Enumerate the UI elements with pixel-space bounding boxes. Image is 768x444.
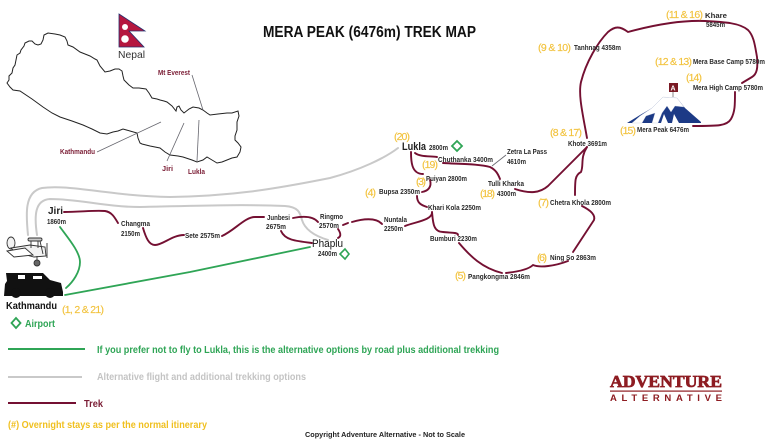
legend: trek: Trek bbox=[84, 399, 103, 410]
copyright: Copyright Adventure Alternative - Not to Scale bbox=[305, 432, 465, 439]
Chetra Khola: Chetra Khola 2800m bbox=[550, 198, 611, 207]
Jiri label bbox=[162, 123, 184, 173]
Lukla: 2800m bbox=[429, 143, 448, 152]
Jiri label: Jiri bbox=[162, 164, 173, 173]
icon: jeep bbox=[4, 273, 63, 298]
Ringmo: Ringmo bbox=[320, 212, 343, 221]
Zetra La Pass bbox=[507, 147, 547, 166]
Lukla bbox=[402, 141, 448, 153]
road route: Kathmandu to Jiri bbox=[60, 227, 80, 288]
Mt Everest label bbox=[158, 68, 203, 110]
Ringmo bbox=[319, 212, 343, 230]
Kathmandu: Kathmandu bbox=[6, 301, 57, 312]
Kathmandu label: Kathmandu bbox=[60, 147, 95, 156]
Ning So: Ning So 2863m bbox=[550, 253, 596, 262]
icon: plane bbox=[7, 237, 47, 266]
Bumburi: Bumburi 2230m bbox=[430, 234, 477, 243]
Nuntala: Nuntala bbox=[384, 215, 408, 224]
day 3: (3) bbox=[416, 176, 426, 188]
Zetra La Pass: Zetra La Pass bbox=[507, 147, 547, 156]
Lukla label: Lukla bbox=[188, 167, 206, 176]
mountain: Mera Peak bbox=[627, 83, 701, 123]
Jiri: 1860m bbox=[47, 217, 66, 226]
Kathmandu label bbox=[60, 122, 161, 156]
Changma bbox=[121, 219, 151, 238]
icon: Phaplu airport bbox=[340, 249, 349, 259]
Khare: 5845m bbox=[706, 20, 725, 29]
Tulli Kharka: Tulli Kharka bbox=[488, 179, 525, 188]
day 9 and 10: (9 & 10) bbox=[538, 42, 571, 54]
day 12 and 13: (12 & 13) bbox=[655, 56, 692, 68]
legend: overnight stays: (#) Overnight stays as per the normal itinerary bbox=[8, 420, 207, 431]
Jiri bbox=[47, 205, 66, 226]
Chuthanka: Chuthanka 3400m bbox=[438, 155, 493, 164]
trek route bbox=[64, 21, 757, 273]
Mt Everest label: Mt Everest bbox=[158, 68, 190, 77]
legend: airport bbox=[12, 318, 56, 330]
flag caption: Nepal bbox=[118, 49, 145, 61]
legend: trek bbox=[8, 399, 103, 410]
Zetra La Pass: 4610m bbox=[507, 157, 526, 166]
day 1, 2 and 21: (1, 2 & 21) bbox=[62, 304, 104, 316]
icon: Lukla airport bbox=[452, 141, 462, 151]
Jiri: Jiri bbox=[48, 205, 63, 217]
Lukla label bbox=[188, 120, 206, 176]
Khote: Khote 3691m bbox=[568, 139, 607, 148]
icon: Nepal flag bbox=[119, 14, 145, 47]
Tulli Kharka: 4300m bbox=[497, 189, 516, 198]
road route: Kathmandu to Phaplu bbox=[65, 247, 310, 295]
day 11 and 16: (11 & 16) bbox=[666, 9, 703, 21]
day 4: (4) bbox=[365, 187, 376, 199]
icon: summit flag: A bbox=[670, 86, 676, 92]
day 18: (18) bbox=[480, 188, 495, 200]
Phaplu: Phaplu bbox=[312, 238, 343, 250]
Puiyan: Puiyan 2800m bbox=[426, 174, 467, 183]
Ringmo: 2570m bbox=[319, 221, 339, 230]
Nuntala: 2250m bbox=[384, 224, 403, 233]
legend: road option: If you prefer not to fly to Lukla, this is the alternative options by road plus additional trekking bbox=[97, 345, 499, 356]
Phaplu: 2400m bbox=[318, 249, 337, 258]
flight route: Kathmandu to Lukla bbox=[27, 148, 398, 235]
Khari Kola: Khari Kola 2250m bbox=[428, 203, 481, 212]
inset map: Nepal bbox=[7, 14, 241, 176]
Tanhnag: Tanhnag 4358m bbox=[574, 43, 621, 52]
Junbesi: 2675m bbox=[266, 222, 286, 231]
day 5: (5) bbox=[455, 270, 466, 282]
Phaplu bbox=[312, 238, 343, 258]
Zetra La Pass connector bbox=[492, 155, 506, 166]
Nepal outline bbox=[7, 33, 241, 163]
legend: airport: Airport bbox=[25, 319, 56, 330]
Lukla: Lukla bbox=[402, 141, 427, 153]
logo: Adventure Alternative bbox=[610, 372, 722, 404]
day 14: (14) bbox=[686, 72, 702, 84]
Changma: Changma bbox=[121, 219, 151, 228]
day 6: (6) bbox=[537, 252, 547, 264]
Junbesi bbox=[266, 213, 290, 231]
logo: Adventure Alternative: ALTERNATIVE bbox=[610, 393, 722, 404]
Pangkongma: Pangkongma 2846m bbox=[468, 272, 530, 281]
day 20: (20) bbox=[394, 131, 410, 143]
logo: Adventure Alternative: ADVENTURE bbox=[610, 372, 722, 391]
day 7: (7) bbox=[538, 197, 549, 209]
Nuntala bbox=[384, 215, 408, 233]
Khare: Khare bbox=[705, 11, 727, 20]
title: MERA PEAK (6476m) TREK MAP bbox=[263, 24, 476, 41]
legend bbox=[8, 318, 499, 431]
Tulli Kharka bbox=[488, 179, 525, 198]
Junbesi: Junbesi bbox=[267, 213, 290, 222]
itinerary day markers bbox=[62, 9, 703, 316]
Sete: Sete 2575m bbox=[185, 231, 220, 240]
Changma: 2150m bbox=[121, 229, 140, 238]
legend: flight option: Alternative flight and additional trekking options bbox=[97, 372, 306, 383]
day 8 and 17: (8 & 17) bbox=[550, 127, 582, 139]
place labels bbox=[6, 11, 765, 312]
Khare bbox=[705, 11, 727, 29]
day 15: (15) bbox=[620, 125, 636, 137]
day 19: (19) bbox=[422, 159, 438, 171]
flight route: Kathmandu to Phaplu bbox=[36, 199, 328, 240]
Mera Peak: Mera Peak 6476m bbox=[637, 125, 689, 134]
Bupsa: Bupsa 2350m bbox=[379, 187, 420, 196]
